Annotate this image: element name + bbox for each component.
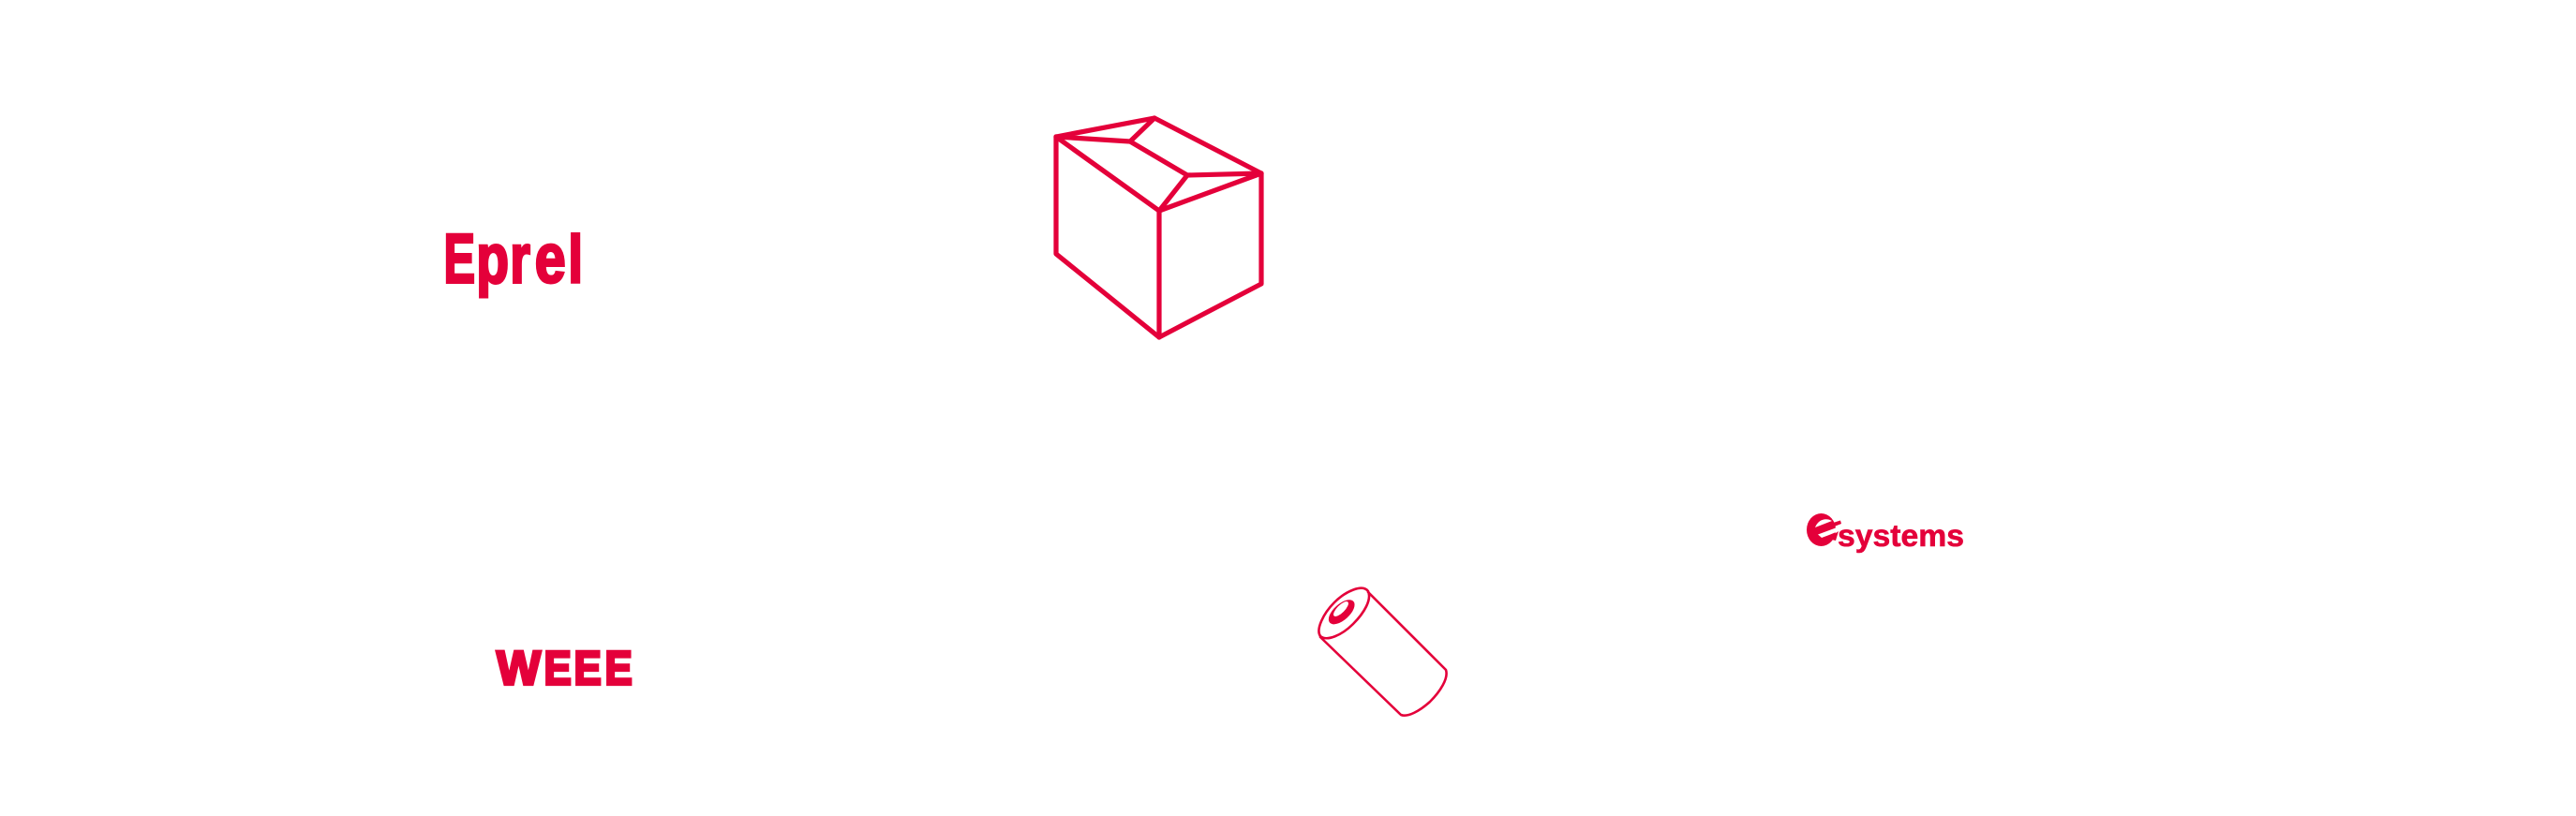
logo: WEEE bbox=[497, 641, 633, 695]
logo: Eprel: r bbox=[510, 220, 530, 297]
wordmark: systems: systems bbox=[1838, 518, 1964, 553]
logo: Eprel: p bbox=[476, 219, 509, 297]
icon: battery bbox=[1318, 588, 1447, 716]
logo: Eprel: E bbox=[444, 221, 475, 298]
logo: WEEE: W bbox=[497, 641, 542, 695]
logo: WEEE: E bbox=[573, 642, 602, 695]
icon: cardboard box bbox=[1056, 118, 1261, 337]
logo: WEEE: E bbox=[543, 642, 572, 695]
logo: WEEE: E bbox=[605, 642, 633, 695]
icon: stylised letter e bbox=[1807, 513, 1841, 546]
logo: Eprel bbox=[444, 219, 583, 298]
logo: Eprel: e bbox=[535, 220, 566, 298]
logo: e-systems bbox=[1807, 513, 1964, 553]
logo: Eprel: l bbox=[568, 223, 583, 297]
